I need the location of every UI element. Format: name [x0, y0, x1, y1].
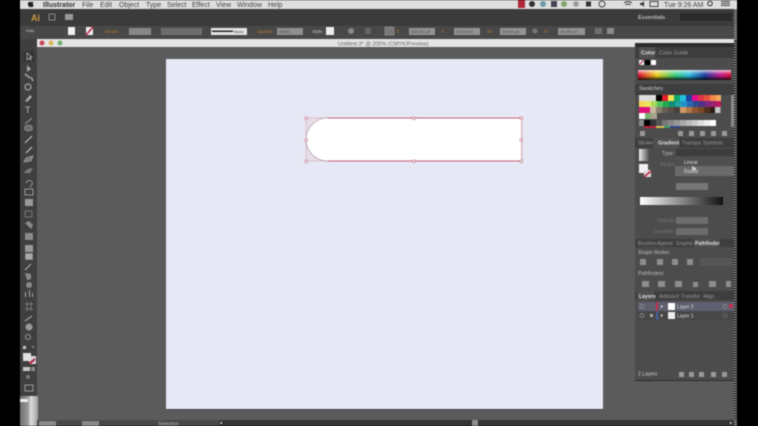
menu bar: Illustrator [43, 2, 76, 9]
menu bar: Tue 9:26 AM [664, 2, 704, 9]
panel: pathfinder: Shape Modes: [638, 250, 670, 256]
panel: pathfinder: Pathfinders: [638, 271, 665, 277]
control bar: Opacity: [257, 29, 274, 34]
control bar: Style: [312, 29, 323, 34]
layer 1 row: Layer 1 [677, 314, 694, 320]
application bar [20, 9, 737, 26]
artboard [166, 59, 603, 409]
tools panel: T [25, 105, 31, 115]
layer 2 row: Layer 2 [677, 304, 694, 310]
panel: gradient: Stroke: [660, 162, 676, 168]
panel: pathfinder [635, 239, 734, 287]
panel: gradient: Stroke [638, 140, 653, 146]
menu bar: View [216, 2, 232, 9]
control bar: 245.61 pt [502, 29, 520, 34]
control bar: 283.391 pt [411, 29, 431, 34]
control bar: X: [396, 29, 400, 34]
panel: layers: Artboard [659, 294, 679, 300]
panel: gradient: Symbols [703, 140, 723, 146]
panel: layers [635, 291, 734, 378]
panel: gradient: Location: [654, 229, 674, 235]
control bar: Path [26, 28, 34, 33]
panel: gradient: Opacity: [657, 218, 675, 224]
panel: pathfinder: Brushes [638, 241, 657, 247]
panel: color: Color [641, 50, 656, 56]
panel: gradient: Type: [662, 151, 674, 157]
panel: color [635, 47, 734, 80]
panel: pathfinder: Appear [657, 241, 673, 247]
mouse cursor [692, 166, 696, 171]
menu bar: Select [167, 2, 187, 9]
panel: gradient [635, 138, 734, 235]
panel dock [635, 43, 734, 381]
menu bar: Effect [192, 2, 210, 9]
control bar [20, 26, 737, 39]
panel: layers: Align [703, 294, 715, 300]
control bar: Basic [234, 29, 244, 34]
control bar: Stroke: [105, 29, 119, 34]
gradient slider [640, 197, 723, 205]
document title bar: Untitled-3* @ 205% (CMYK/Preview) [338, 42, 429, 48]
color spectrum [638, 70, 731, 80]
search field [680, 13, 732, 21]
Ai logo: Ai [31, 13, 40, 23]
panel: pathfinder: Pathfinder [695, 241, 720, 247]
menu bar: Type [146, 2, 161, 9]
application bar: Essentials [638, 15, 665, 21]
tools panel [20, 39, 37, 396]
menu bar: Object [119, 2, 139, 9]
panel: pathfinder: Graphic [676, 241, 694, 247]
panel: color: Color Guide [659, 50, 688, 56]
panel: layers: 2 Layers [638, 372, 658, 378]
menu bar: Edit [100, 2, 112, 9]
panel: gradient: Gradient [658, 140, 680, 146]
type dropdown [675, 157, 734, 176]
control bar: 100% [279, 29, 290, 34]
panel: gradient: Transpa [682, 140, 701, 146]
type dropdown: Radial [684, 169, 698, 175]
light strip under tools [20, 396, 38, 426]
type dropdown: Linear [684, 160, 698, 166]
right edge scrollbar [734, 9, 737, 426]
menu bar: Help [268, 2, 283, 9]
control bar: H: [544, 29, 548, 34]
menu bar [20, 0, 737, 9]
menu bar: Window [237, 2, 263, 9]
menu bar: File [82, 2, 93, 9]
control bar: 49.269 pt [560, 29, 578, 34]
status bar [37, 420, 737, 426]
control bar: W: [487, 29, 492, 34]
selected rounded shape [305, 117, 522, 162]
control bar: 92.634 pt [456, 29, 474, 34]
panel: layers: Transfor [681, 294, 700, 300]
panel: swatches: Swatches [639, 86, 663, 92]
artboard edge shadow [166, 409, 603, 410]
control bar: Y: [441, 29, 445, 34]
panel: swatches [635, 84, 734, 136]
gradient angle field [676, 183, 708, 190]
panel: layers: Layers [639, 294, 656, 300]
document title bar [37, 39, 734, 48]
fill and stroke swatches [23, 353, 36, 364]
scrollbar thumb [472, 420, 478, 426]
